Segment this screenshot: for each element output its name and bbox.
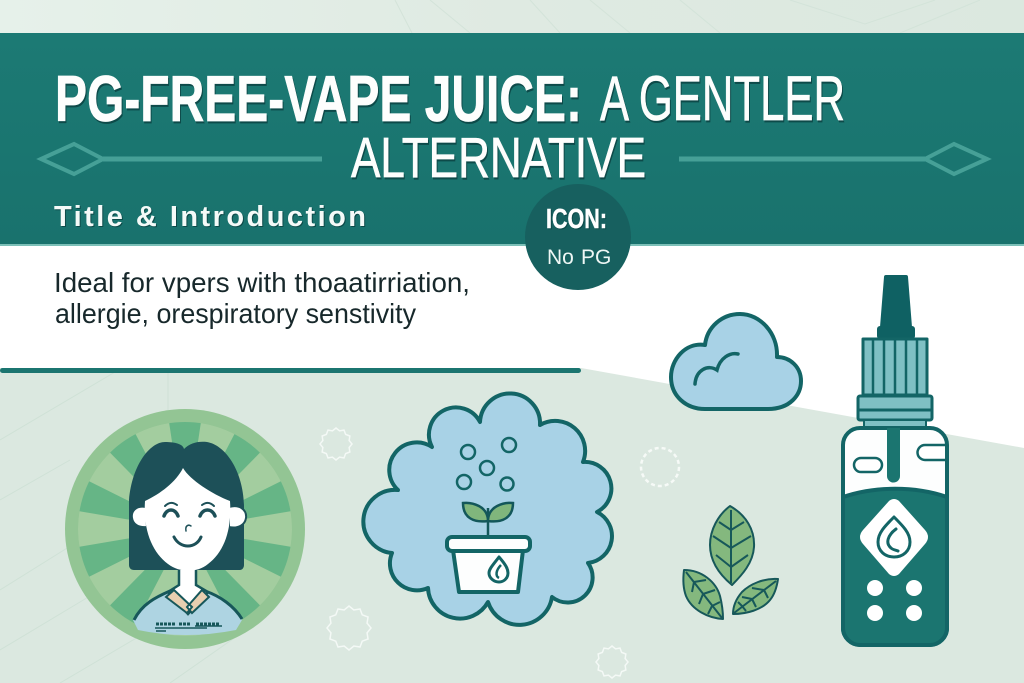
background lines lower left xyxy=(0,372,260,683)
collar xyxy=(166,590,209,613)
badge: no PG icon: ICON: xyxy=(546,203,607,234)
decorative dashed circle xyxy=(641,448,679,486)
drop icon xyxy=(878,517,910,557)
neck xyxy=(168,565,208,614)
bottle neck xyxy=(864,420,926,428)
dots xyxy=(867,580,922,621)
dropper tip xyxy=(880,275,912,327)
diamond label xyxy=(860,499,928,576)
badge: no PG icon xyxy=(525,184,631,290)
shirt xyxy=(133,590,242,635)
decorative sparkle outline xyxy=(327,606,371,650)
intro text xyxy=(54,267,470,329)
seedling xyxy=(463,503,513,536)
section heading: Title & Introduction xyxy=(54,201,366,233)
leaves icon xyxy=(683,506,778,619)
cap ring xyxy=(858,396,932,420)
header banner xyxy=(0,33,1024,246)
title: A GENTLER xyxy=(600,64,845,134)
small cloud icon xyxy=(671,314,801,409)
vapor cloud with plant xyxy=(363,393,612,625)
ribbed cap xyxy=(863,339,927,395)
inner tube xyxy=(887,428,900,483)
portrait: smiling person xyxy=(65,409,305,649)
hair xyxy=(129,442,244,570)
pot xyxy=(447,537,530,592)
left leaf xyxy=(683,570,723,619)
title xyxy=(55,62,845,190)
shirt scribble xyxy=(155,626,222,631)
decorative sparkle outline xyxy=(320,428,352,460)
bubbles xyxy=(457,438,516,490)
divider bar xyxy=(0,368,581,373)
badge: no PG icon: No xyxy=(547,246,574,269)
right label pill xyxy=(918,445,945,460)
left title ornament xyxy=(41,144,322,174)
title: PG-FREE-VAPE JUICE: xyxy=(55,62,582,135)
face xyxy=(145,468,230,571)
eyes, nose and mouth xyxy=(164,503,215,546)
right title ornament xyxy=(679,144,987,174)
white introduction area xyxy=(0,245,1024,448)
ears xyxy=(132,506,246,528)
right leaf xyxy=(733,579,778,614)
intro text: Ideal for vpers with thoaatirriation, xyxy=(54,267,470,298)
bottle body xyxy=(843,428,947,645)
shoulder lines xyxy=(134,591,242,620)
left label pill xyxy=(854,458,882,472)
badge: no PG icon: PG xyxy=(581,246,611,269)
title: ALTERNATIVE xyxy=(351,126,646,190)
cloud shape xyxy=(363,393,612,625)
top leaf xyxy=(710,506,754,585)
decorative sparkle outline xyxy=(596,646,628,678)
dropper bottle xyxy=(843,275,947,645)
intro text: allergie, orespiratory senstivity xyxy=(55,298,416,329)
collar xyxy=(877,326,915,339)
liquid xyxy=(843,489,947,645)
